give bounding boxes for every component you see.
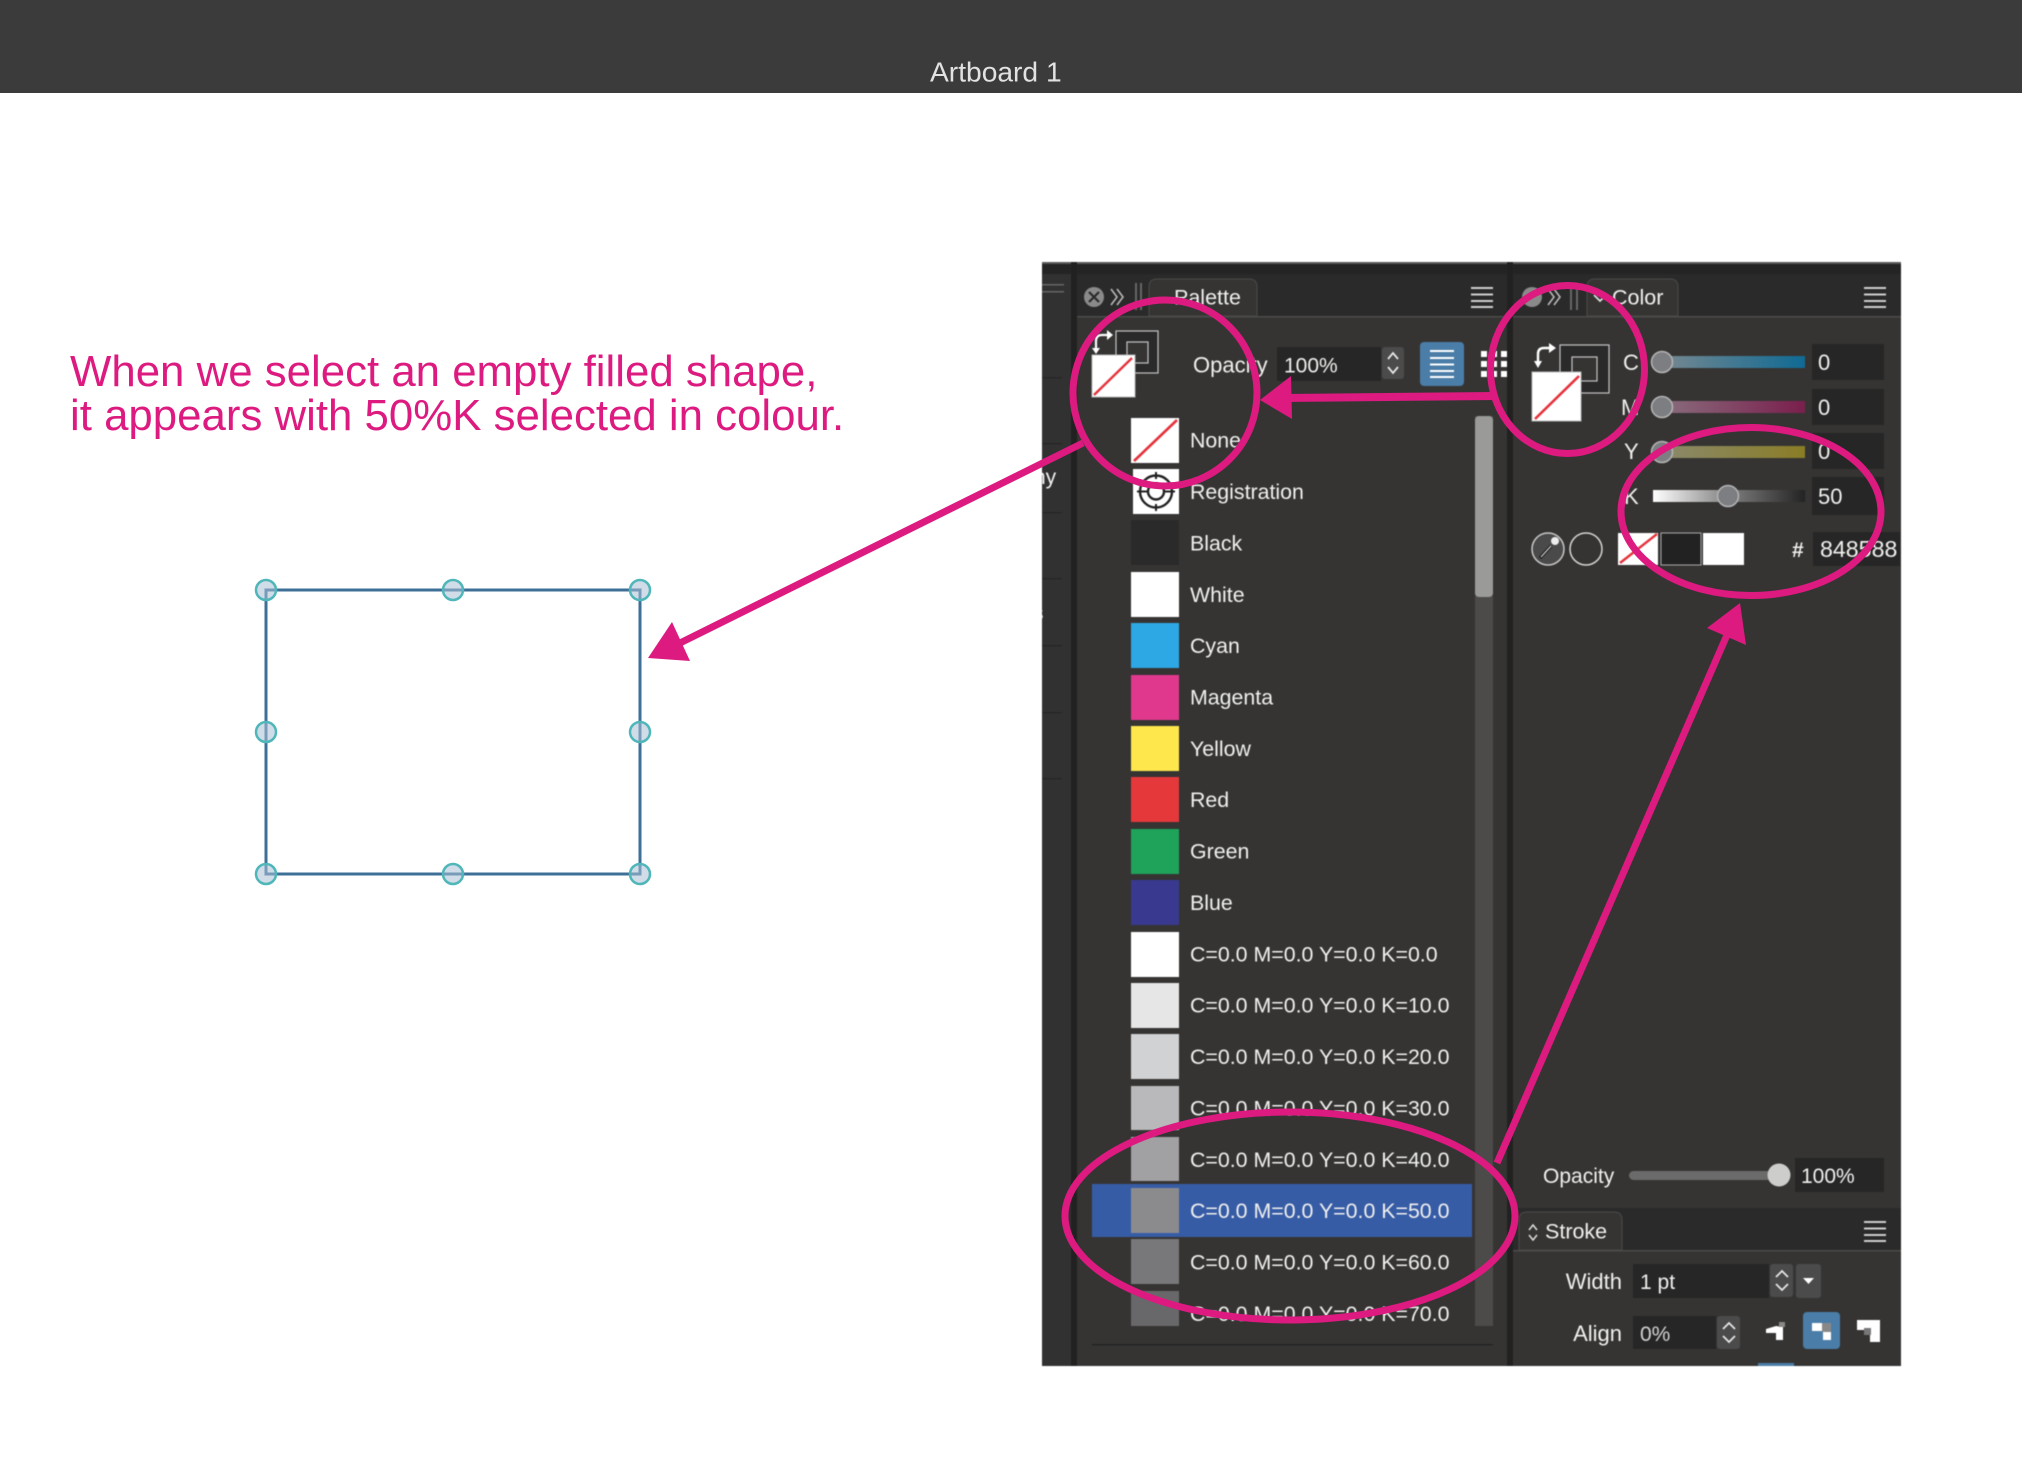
hex value: 848588 [1820,536,1897,562]
callout ellipse: K50 row [1065,1112,1515,1320]
CMYK sliders [1621,344,1884,515]
artboard title: Artboard 1 [930,56,1062,88]
color tab: Color [1612,286,1663,310]
swatch: White [1131,572,1245,617]
callout ellipse: color fill widget [1490,286,1644,454]
swatch: K70: C=0.0 M=0.0 Y=0.0 K=70.0 [1190,1302,1450,1326]
width control: Width [1566,1269,1622,1294]
slider M: M [1621,395,1639,420]
color opacity slider: 100% [1801,1165,1855,1188]
swatch: K60 [1131,1239,1450,1284]
selected row highlight [1092,1184,1472,1237]
left sliver panel [1041,284,1064,780]
hex value: # [1792,539,1804,562]
slider Y [1624,433,1884,469]
palette panel [1077,262,1513,1366]
stroke panel [1513,1208,1901,1366]
selected empty rectangle with handles [256,580,650,884]
swatch: K0: C=0.0 M=0.0 Y=0.0 K=0.0 [1190,942,1438,966]
swatch: K40 [1131,1137,1450,1181]
swatch: K20: C=0.0 M=0.0 Y=0.0 K=20.0 [1190,1045,1450,1069]
fill and stroke widget [1092,330,1158,397]
left sliver panel: ny [1034,466,1057,489]
align control: Align [1573,1321,1622,1346]
grid view button [1481,351,1507,377]
color opacity slider [1543,1158,1884,1192]
palette swatch list [1131,418,1450,1326]
swatch: Red: Red [1190,788,1229,812]
arrow: K50 row to K slider [1497,603,1746,1163]
palette tab: Palette [1174,286,1241,310]
swatch: Green [1131,829,1249,874]
swatch: K60: C=0.0 M=0.0 Y=0.0 K=60.0 [1190,1250,1450,1274]
swatch: K40: C=0.0 M=0.0 Y=0.0 K=40.0 [1190,1148,1450,1172]
color opacity slider: Opacity [1543,1165,1615,1188]
left sliver panel: s [1033,602,1044,625]
align control: 0% [1640,1323,1670,1346]
eyedropper icon [1532,533,1564,565]
swatch: Black: Black [1190,532,1243,556]
list view button [1420,342,1464,386]
swatch: Green: Green [1190,840,1249,864]
palette tab [1149,279,1257,316]
hex value [1792,532,1900,566]
stroke menu icon [1864,1222,1886,1241]
palette menu icon [1471,288,1493,307]
swatch: Yellow [1131,726,1252,771]
stroke tab: Stroke [1545,1220,1607,1244]
scrollbar [1475,416,1493,1326]
opacity control [1193,347,1404,381]
swatch: K50: C=0.0 M=0.0 Y=0.0 K=50.0 [1190,1199,1450,1223]
swatch: Red [1131,777,1229,822]
peek button [1758,1363,1794,1366]
swatch: None [1131,418,1241,463]
arrow: color widget to palette widget [1260,376,1495,419]
swatch: Black [1131,520,1243,565]
opacity control: 100% [1284,354,1338,378]
width control [1566,1264,1821,1298]
swatch: Yellow: Yellow [1190,737,1252,761]
heading text: it appears with 50%K selected in colour. [70,391,844,440]
opacity control: Opacity [1193,352,1268,378]
swatch: K30 [1131,1086,1450,1130]
align centre button [1803,1312,1840,1349]
slider C: 0 [1818,350,1830,375]
grip icon [1136,283,1141,310]
heading text: When we select an empty filled shape, [70,347,817,396]
slider K [1624,477,1884,515]
swatch: K10: C=0.0 M=0.0 Y=0.0 K=10.0 [1190,994,1450,1018]
app screenshot panels [1033,262,1901,1366]
close button icon [1084,287,1104,307]
grip icon [1571,283,1577,310]
slider C: C [1623,350,1639,375]
swatch: Registration [1133,469,1304,514]
swatch: Registration: Registration [1190,480,1304,504]
swatch: Magenta: Magenta [1190,686,1273,710]
stroke tab [1519,1212,1622,1250]
swatch: Blue [1131,880,1233,925]
width control: 1 pt [1640,1271,1675,1294]
color menu icon [1864,288,1886,307]
slider Y: Y [1624,439,1639,464]
align control [1573,1316,1740,1349]
swatch: K30: C=0.0 M=0.0 Y=0.0 K=30.0 [1190,1096,1450,1120]
align inside icon [1857,1320,1880,1342]
left divider [1071,262,1077,1366]
slider K: K [1624,484,1639,509]
empty circle icon [1570,533,1602,565]
arrow: palette to shape [648,443,1083,661]
swatch: Blue: Blue [1190,891,1233,915]
collapse chevrons icon [1548,289,1560,305]
slider K: 50 [1818,484,1842,509]
color panel [1513,274,1901,1192]
color tab [1587,279,1678,316]
slider C [1623,344,1884,380]
swatch: K20 [1131,1034,1450,1079]
slider Y: 0 [1818,439,1830,464]
fill and stroke widget [1532,343,1609,421]
swatch: Cyan [1131,623,1240,668]
slider M: 0 [1818,395,1830,420]
close button icon [1522,287,1542,307]
swatch: K70 [1131,1291,1450,1326]
callout ellipse: palette fill widget [1073,300,1257,486]
align outside icon [1766,1322,1785,1340]
swatch: None: None [1190,428,1241,452]
swatch: Magenta [1131,675,1273,720]
swatch: K10 [1131,983,1450,1028]
swatch: White: White [1190,583,1245,607]
swatch: K50 [1131,1188,1450,1233]
swatch: K0 [1131,932,1438,977]
slider M [1621,389,1884,425]
recent colour swatches [1618,533,1744,565]
callout ellipse: K slider and hex [1621,428,1881,596]
top title bar [0,0,2022,93]
collapse chevrons icon [1111,289,1123,305]
swatch: Cyan: Cyan [1190,634,1240,658]
